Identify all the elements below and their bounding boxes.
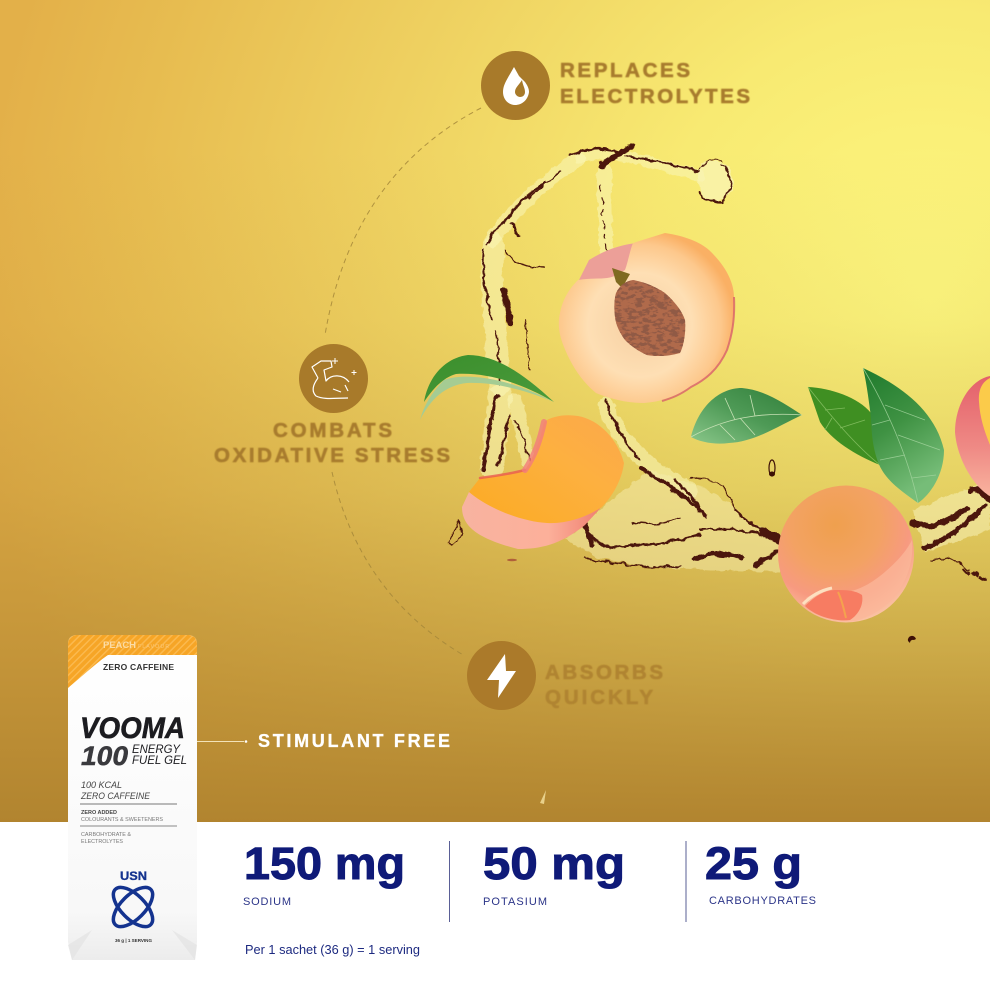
sachet claims: CARBOHYDRATE & [81, 832, 131, 838]
liquid splash [447, 146, 990, 580]
sachet claims: COLOURANTS & SWEETENERS [81, 817, 163, 823]
sachet claims [80, 780, 177, 845]
feature: replaces electrolytes [481, 51, 750, 120]
feature: absorbs quickly [467, 641, 663, 710]
product sachet [68, 635, 197, 960]
leaf: bent leaf left [420, 355, 554, 420]
sachet product name: VOOMA [80, 712, 185, 745]
stat: potassium: POTASIUM [483, 896, 547, 908]
icon: lightning bolt [467, 641, 536, 710]
stat: sodium: 150 mg [244, 838, 405, 889]
sachet claims: ELECTROLYTES [81, 839, 123, 845]
sachet USN logo: USN [120, 869, 147, 883]
heading: absorbs quickly: QUICKLY [545, 686, 653, 709]
leaf: centre leaf [691, 388, 802, 444]
divider [449, 841, 450, 922]
product sachet: FLAVOUR [138, 644, 169, 650]
sachet product name: 100 [81, 741, 128, 771]
icon: flexed arm [299, 344, 368, 413]
sachet USN logo [107, 869, 159, 933]
sachet flavour label: PEACH [103, 640, 136, 651]
heading: absorbs quickly: ABSORBS [545, 661, 663, 684]
heading: replaces electrolytes: REPLACES [560, 59, 690, 82]
dashed connector arcs [325, 108, 481, 656]
stat: sodium: SODIUM [243, 896, 291, 908]
serving size note: Per 1 sachet (36 g) = 1 serving [245, 942, 420, 957]
sachet product name [80, 712, 187, 771]
splash droplets [507, 460, 916, 804]
icon: water drops [481, 51, 550, 120]
sachet orange header [68, 635, 197, 688]
leaf: pair of leaves right [808, 368, 944, 503]
sachet claims: 100 KCAL [81, 780, 122, 791]
peach wedge [462, 415, 624, 549]
heading: combats oxidative stress: OXIDATIVE STRESS [214, 444, 450, 467]
sachet claims: ZERO ADDED [81, 810, 117, 816]
stat: sodium [243, 838, 405, 908]
heading: combats oxidative stress: COMBATS [273, 419, 392, 442]
sachet claims: ZERO CAFFEINE [80, 791, 151, 802]
stat: potassium: 50 mg [483, 838, 625, 889]
sachet product name: ENERGY [132, 742, 181, 756]
stat: carbohydrates: 25 g [705, 838, 802, 889]
sachet product name: FUEL GEL [132, 753, 187, 767]
feature: combats oxidative stress [214, 344, 450, 467]
peach at right edge [955, 376, 990, 496]
stat: potassium [483, 838, 625, 908]
peach half with stone [559, 233, 734, 403]
stat: carbohydrates: CARBOHYDRATES [709, 895, 816, 907]
divider [686, 841, 687, 922]
white nutrition panel [0, 822, 990, 990]
heading: replaces electrolytes: ELECTROLYTES [560, 85, 750, 108]
callout: stimulant free: STIMULANT FREE [258, 731, 450, 751]
sachet serving note: 36 g | 1 SERVING [115, 938, 152, 943]
whole peach [778, 486, 914, 622]
sachet zero caffeine label: ZERO CAFFEINE [103, 662, 174, 672]
stat: carbohydrates [705, 838, 816, 907]
